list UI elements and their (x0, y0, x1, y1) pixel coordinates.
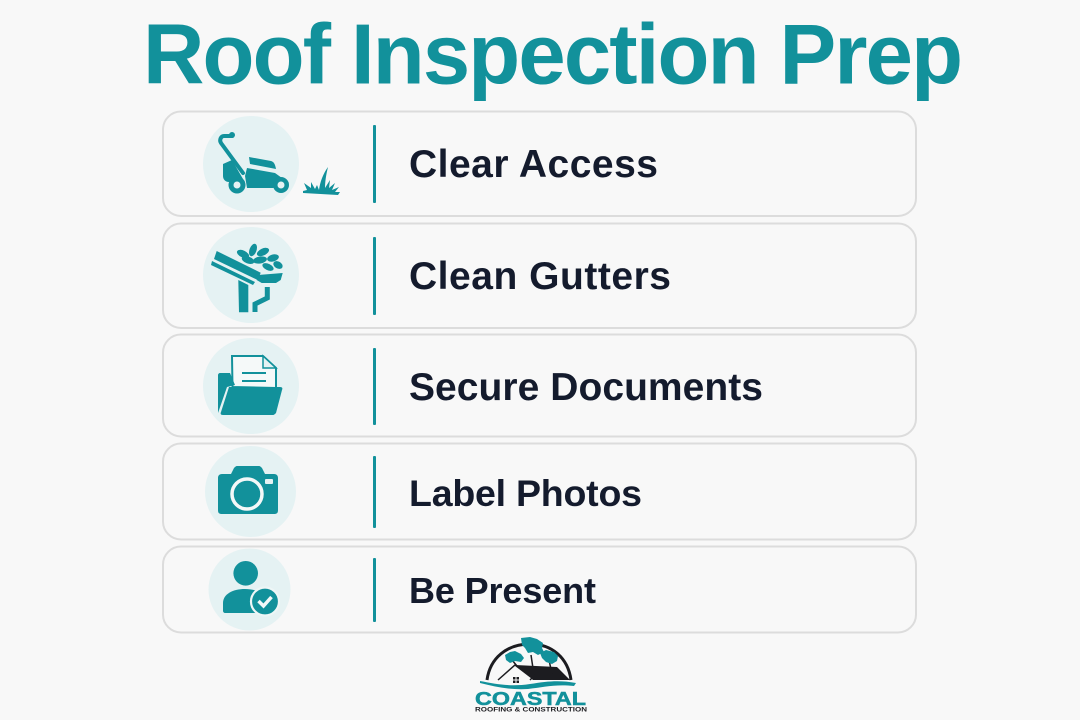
logo: coastal roofing and construction (475, 637, 587, 714)
logo tagline: ROOFING & CONSTRUCTION (475, 706, 587, 714)
label: label photos: Label Photos (409, 472, 642, 514)
icon: grass tuft (303, 167, 340, 195)
panel: label photos (163, 444, 916, 540)
divider (373, 237, 376, 315)
icon: person with check (208, 548, 290, 630)
title: Roof Inspection Prep (143, 8, 963, 102)
panel: clean gutters (163, 224, 916, 328)
icon: lawn mower (203, 116, 299, 212)
divider (373, 348, 376, 425)
panel: be present (163, 546, 916, 632)
label: secure documents: Secure Documents (409, 366, 763, 409)
label: clear access: Clear Access (409, 143, 658, 186)
icon: camera (205, 446, 296, 537)
icon: gutter with leaves (203, 227, 299, 323)
icon: document folder (203, 338, 299, 434)
label: be present: Be Present (409, 570, 596, 611)
label: clean gutters: Clean Gutters (409, 255, 671, 298)
divider (373, 456, 376, 528)
panel: clear access (163, 112, 916, 216)
divider (373, 125, 376, 203)
divider (373, 558, 376, 622)
logo wordmark: COASTAL (475, 689, 586, 709)
panel: secure documents (163, 334, 916, 436)
